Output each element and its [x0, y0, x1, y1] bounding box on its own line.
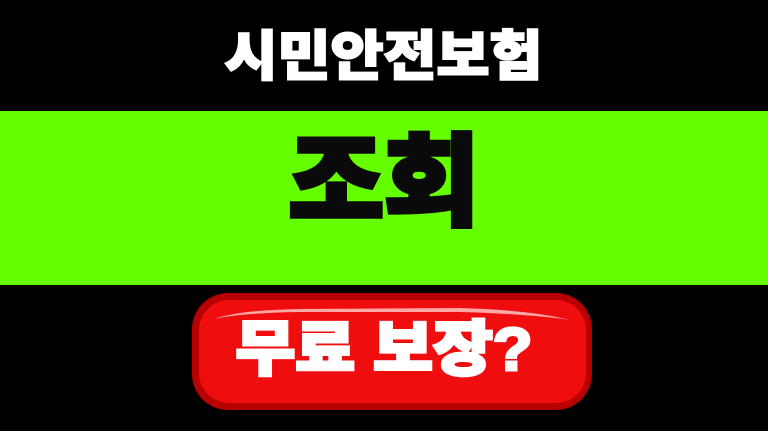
- heading: lookup: 조회: [288, 127, 480, 239]
- title: 시민안전보험: [224, 27, 542, 87]
- button label: 무료 보장?: [236, 316, 532, 383]
- button highlight: [214, 308, 570, 320]
- red button: [192, 293, 592, 410]
